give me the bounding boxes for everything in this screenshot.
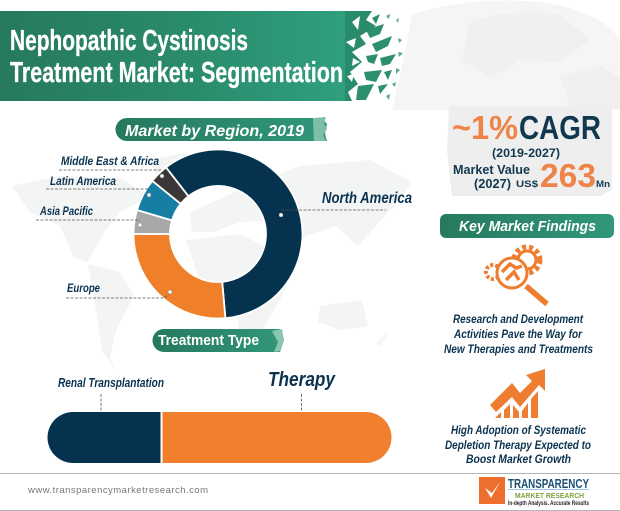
footer rules [0,474,620,510]
heading: key market findings [440,214,614,238]
market value: Market Value [453,163,530,177]
website address: www.transparencymarketresearch.com [27,485,208,496]
label: North America: North America [322,190,412,207]
logo: Transparency Market Research: MARKET RESEARCH [515,491,584,500]
heading: treatment type: Treatment Type [158,332,259,349]
label: Europe: Europe [67,281,100,295]
label: Therapy: Therapy [268,369,336,391]
finding: research and development [444,312,593,356]
title [10,25,343,89]
finding: systematic depletion therapy: Boost Market Growth [466,452,571,466]
logo: Transparency Market Research [479,477,590,507]
heading: market by region [116,117,327,141]
background world map [12,152,412,372]
label: Asia Pacific: Asia Pacific [39,204,93,218]
CAGR and market value panel: US$ [516,179,538,189]
CAGR and market value panel: (2027) [474,177,511,191]
treatment type bar chart [48,369,392,463]
segment: Middle East and Africa [152,167,188,204]
donut chart: market by region [134,150,302,319]
finding: research and development: Activities Pave the Way for [453,327,583,341]
logo: Transparency Market Research: TRANSPARENCY [508,477,590,491]
label: Renal Transplantation: Renal Transplantation [58,376,164,390]
CAGR and market value panel: Mn [596,179,610,189]
label: Latin America: Latin America [50,174,116,188]
heading: market by region: Market by Region, 2019 [125,123,304,140]
segment: North America [166,150,302,318]
logo: Transparency Market Research: In-depth Analysis. Accurate Results [508,501,590,507]
segment: Latin America [137,181,181,220]
title: Nephopathic Cystinosis [10,25,248,57]
shattered fragments [345,11,403,101]
CAGR figure: ~1% [452,109,518,146]
CAGR and market value panel: 263 [540,157,596,194]
bar: Therapy [162,412,392,463]
CAGR period: (2019-2027) [492,148,560,160]
title: Treatment Market: Segmentation [10,57,343,89]
icon: growth arrow and bars [490,369,545,418]
finding: research and development: Research and Development [453,312,584,326]
segment: Asia Pacific [134,210,172,234]
CAGR and market value panel [447,106,612,196]
finding: research and development: New Therapies and Treatments [444,342,593,356]
finding: systematic depletion therapy: Depletion Therapy Expected to [445,438,591,452]
region labels with leader lines [36,154,412,298]
finding: systematic depletion therapy [445,423,591,466]
background globe [392,0,620,110]
finding: systematic depletion therapy: High Adoption of Systematic [451,423,586,437]
header band [0,11,403,101]
segment: Europe [134,234,225,319]
heading: key market findings: Key Market Findings [459,219,596,235]
icon: gears and magnifying glass [486,247,547,304]
bar: Renal Transplantation [48,412,161,463]
label: Middle East and Africa: Middle East & Africa [61,154,159,168]
CAGR and market value panel: CAGR [519,109,601,146]
heading: treatment type [152,329,284,352]
